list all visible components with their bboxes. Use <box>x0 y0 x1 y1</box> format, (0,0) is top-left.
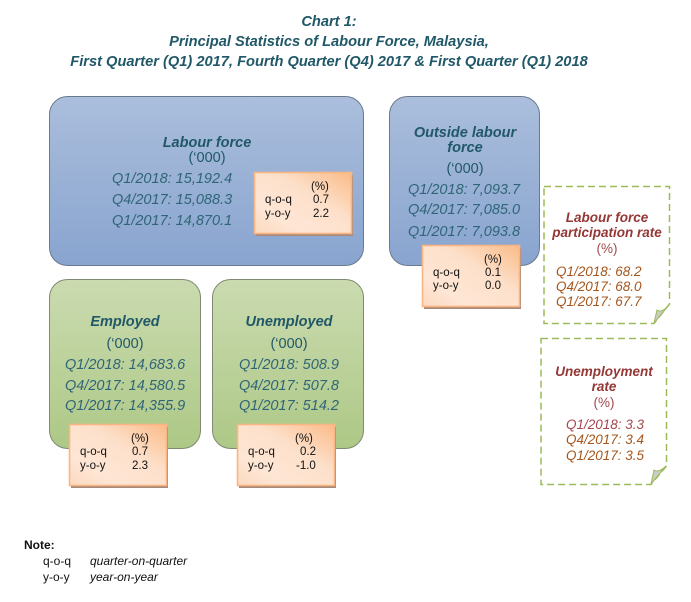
heading: unemployed: Unemployed <box>245 314 334 330</box>
callout: employed change: (%) <box>131 433 149 445</box>
callout: unemployed change: (%) <box>295 433 313 445</box>
values: labour force: Q1/2018: 15,192.4 <box>112 171 232 187</box>
callout: labour force change: (%) <box>311 181 329 193</box>
callout: unemployed change: q-o-q <box>248 446 275 458</box>
callout: employed change: q-o-q <box>80 446 107 458</box>
note: year-on-year <box>89 570 159 584</box>
heading: unemployment rate <box>555 364 653 394</box>
values: employed: Q1/2017: 14,355.9 <box>65 398 185 414</box>
callout: employed change: 0.7 <box>132 446 148 458</box>
heading: unemployment rate: Unemployment <box>555 364 653 379</box>
heading: participation rate: participation rate <box>551 225 662 240</box>
heading: participation rate <box>551 210 662 240</box>
callout: labour force change: 2.2 <box>313 208 329 220</box>
callout: labour force change: q-o-q <box>265 194 292 206</box>
note: y-o-y <box>43 570 70 584</box>
values: employed: Q1/2018: 14,683.6 <box>65 357 186 373</box>
heading: employed: Employed <box>90 314 161 330</box>
values: participation rate <box>556 264 642 309</box>
callout: labour force change: 0.7 <box>313 194 329 206</box>
values: unemployment rate: Q1/2018: 3.3 <box>566 417 645 432</box>
values: unemployed: Q4/2017: 507.8 <box>239 378 339 394</box>
callout: unemployed change <box>238 424 336 488</box>
heading: labour force: Labour force <box>163 135 251 151</box>
unit: participation rate: (%) <box>596 241 618 256</box>
values: participation rate: Q4/2017: 68.0 <box>556 279 642 294</box>
title: First Quarter (Q1) 2017, Fourth Quarter (Q4) 2017 & First Quarter (Q1) 2018 <box>70 54 589 70</box>
heading: outside labour force <box>414 125 518 156</box>
panel: unemployment rate <box>541 338 666 484</box>
values: outside labour force: Q1/2017: 7,093.8 <box>408 224 520 240</box>
values: participation rate: Q1/2018: 68.2 <box>556 264 642 279</box>
values: outside labour force <box>408 182 521 240</box>
panel: outside labour force <box>390 96 540 266</box>
values: unemployment rate <box>566 417 645 463</box>
panel: labour force participation rate <box>544 186 670 324</box>
callout: employed change <box>70 424 168 488</box>
note: quarter-on-quarter <box>90 554 188 568</box>
icon: folded corner <box>654 305 669 323</box>
unit: outside labour force: (‘000) <box>446 161 484 177</box>
unit: labour force: (‘000) <box>188 150 226 166</box>
values: unemployment rate: Q4/2017: 3.4 <box>566 432 644 447</box>
callout: outside labour force change: (%) <box>484 254 502 266</box>
callout: outside labour force change <box>422 246 521 309</box>
unit: unemployed: (‘000) <box>270 336 308 352</box>
values: employed <box>65 357 186 414</box>
callout: outside labour force change: q-o-q <box>433 267 460 279</box>
values: unemployed <box>239 357 339 414</box>
values: labour force: Q1/2017: 14,870.1 <box>112 213 232 229</box>
panel: labour force <box>50 96 364 266</box>
callout: labour force change <box>254 172 353 236</box>
callout: unemployed change: y-o-y <box>248 460 274 472</box>
heading: participation rate: Labour force <box>566 210 649 225</box>
values: unemployment rate: Q1/2017: 3.5 <box>566 448 645 463</box>
values: outside labour force: Q4/2017: 7,085.0 <box>408 202 520 218</box>
heading: outside labour force: force <box>447 140 483 156</box>
heading: unemployment rate: rate <box>592 379 617 394</box>
values: unemployed: Q1/2018: 508.9 <box>239 357 339 373</box>
unit: employed: (‘000) <box>106 336 144 352</box>
note <box>24 538 188 584</box>
heading: outside labour force: Outside labour <box>414 125 518 141</box>
values: participation rate: Q1/2017: 67.7 <box>556 294 642 309</box>
values: unemployed: Q1/2017: 514.2 <box>239 398 339 414</box>
callout: employed change: y-o-y <box>80 460 106 472</box>
callout: unemployed change: 0.2 <box>300 446 316 458</box>
callout: employed change: 2.3 <box>132 460 148 472</box>
panel: unemployed <box>212 280 364 448</box>
callout: labour force change: y-o-y <box>265 208 291 220</box>
callout: outside labour force change: 0.0 <box>485 280 501 292</box>
panel: employed <box>50 280 200 448</box>
values: labour force: Q4/2017: 15,088.3 <box>112 192 232 208</box>
callout: unemployed change: -1.0 <box>296 460 316 472</box>
icon: folded corner <box>651 466 666 484</box>
unit: unemployment rate: (%) <box>594 395 614 410</box>
title <box>70 14 589 70</box>
values: outside labour force: Q1/2018: 7,093.7 <box>408 182 521 198</box>
callout: outside labour force change: 0.1 <box>485 267 501 279</box>
note: q-o-q <box>43 554 71 568</box>
values: employed: Q4/2017: 14,580.5 <box>65 378 186 394</box>
note: Note: <box>24 538 55 552</box>
callout: outside labour force change: y-o-y <box>433 280 459 292</box>
title: Principal Statistics of Labour Force, Malaysia, <box>169 34 489 50</box>
values: labour force <box>112 171 232 229</box>
title: Chart 1: <box>301 14 357 30</box>
